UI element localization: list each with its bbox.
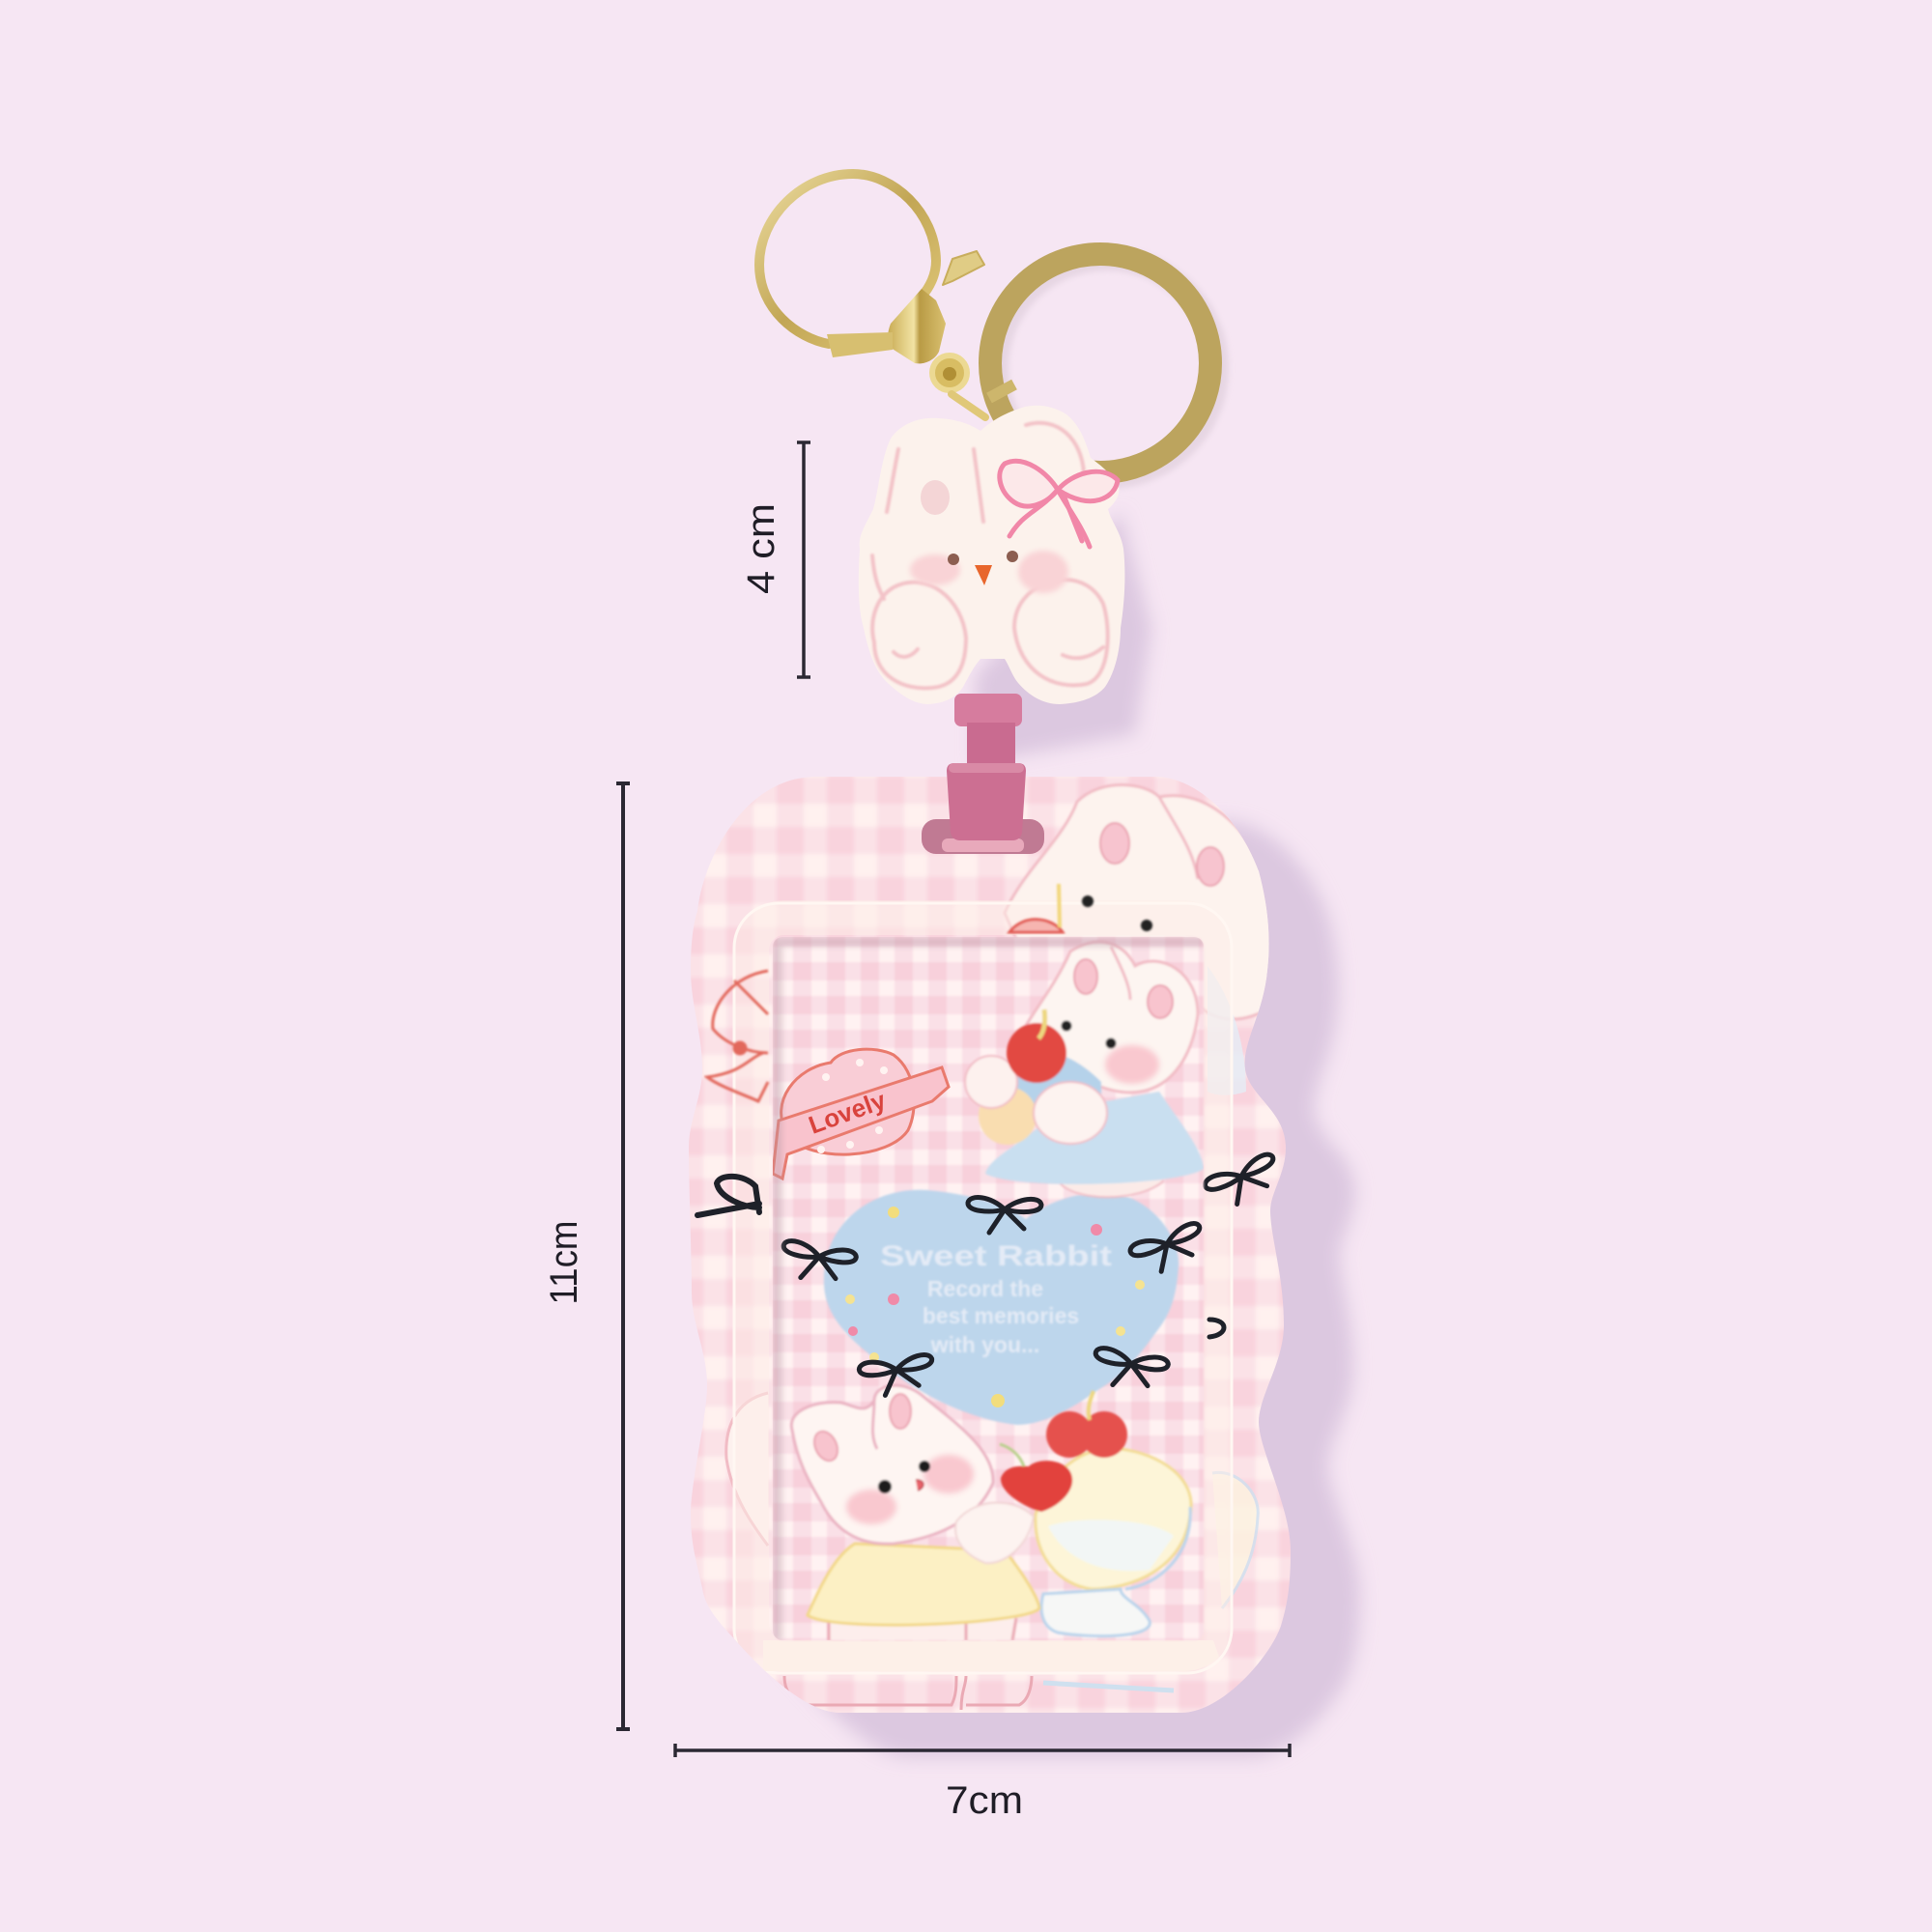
frame edge xyxy=(734,903,1232,1673)
window inner shadow xyxy=(773,937,1204,1640)
lanyard slot xyxy=(922,763,1044,854)
charm blush xyxy=(910,554,960,585)
black bow on card left xyxy=(697,1177,759,1215)
charm nose xyxy=(975,565,992,585)
bow lower right xyxy=(1092,1347,1169,1392)
ribbon xyxy=(773,1067,949,1179)
blue dress rabbit xyxy=(965,942,1204,1197)
ears xyxy=(890,1394,911,1429)
heart sparkles xyxy=(845,1207,1145,1407)
paws xyxy=(965,1056,1017,1108)
polka dots xyxy=(817,1059,902,1153)
dimension: 7cm xyxy=(675,1744,1290,1822)
bow left xyxy=(780,1239,857,1285)
head xyxy=(791,1385,993,1544)
clasp body xyxy=(888,289,946,363)
raised frame xyxy=(752,918,1214,1657)
cup stand xyxy=(1041,1589,1150,1636)
dress xyxy=(808,1544,1039,1625)
rabbit on card top right xyxy=(1005,784,1275,1019)
cup xyxy=(1036,1448,1191,1589)
charm eyes xyxy=(948,554,959,565)
charm body xyxy=(859,406,1124,704)
jump ring xyxy=(932,355,967,390)
cream rim xyxy=(1043,1683,1174,1690)
clasp thumb xyxy=(943,251,984,285)
top cherry xyxy=(1046,1411,1093,1458)
eyes xyxy=(1061,1020,1072,1032)
feet on card bottom xyxy=(784,1676,1032,1710)
blue heart xyxy=(824,1190,1179,1425)
gingham face xyxy=(667,763,1314,1729)
black bow on card right xyxy=(1203,1151,1275,1207)
dimension: 4 cm xyxy=(740,442,810,677)
blue bowl xyxy=(1016,1057,1103,1104)
bottom rabbit and cup xyxy=(791,1385,1191,1640)
red rabbit on card left xyxy=(707,971,768,1101)
ghost ear on card left xyxy=(726,1393,768,1546)
pale dress on card right xyxy=(1208,966,1246,1095)
label 7cm: 7cm xyxy=(946,1779,1023,1822)
bow right xyxy=(1128,1219,1209,1279)
black bow fragment on card right xyxy=(1209,1320,1224,1337)
mouth xyxy=(916,1480,923,1491)
arm xyxy=(955,1503,1034,1563)
rabbit charm xyxy=(859,406,1124,704)
frame bottom band xyxy=(763,1640,1219,1671)
cherry xyxy=(1007,1023,1066,1083)
heart body text: best memories xyxy=(923,1303,1079,1328)
soft shadows xyxy=(758,512,1360,1757)
bow lower left xyxy=(858,1351,937,1399)
held cherry xyxy=(1001,1461,1072,1512)
head xyxy=(1024,942,1198,1093)
legs xyxy=(829,1618,1018,1640)
label 4 cm: 4 cm xyxy=(740,503,782,594)
clasp bar xyxy=(827,332,893,357)
heart body text: with you... xyxy=(930,1332,1039,1357)
heart body text: Record the xyxy=(927,1276,1043,1301)
heart body text xyxy=(923,1276,1079,1357)
charm outline art xyxy=(872,423,1108,688)
eyes xyxy=(878,1480,892,1493)
card body xyxy=(667,763,1314,1729)
ears xyxy=(1074,959,1097,994)
dimension: 11cm xyxy=(543,783,630,1729)
rabbit eyes and cherry on card xyxy=(1009,884,1152,932)
window bows xyxy=(780,1198,1209,1399)
clasp ring xyxy=(759,174,936,344)
label 11cm: 11cm xyxy=(543,1221,585,1304)
product dimension infographic xyxy=(551,169,1366,1814)
ribbon text: Lovely xyxy=(805,1085,890,1140)
lobster clasp xyxy=(759,174,985,417)
blush xyxy=(1105,1045,1159,1084)
charm pink bow xyxy=(1000,461,1118,547)
card lanyard clip xyxy=(954,694,1022,771)
charm inner ear xyxy=(921,480,950,515)
key ring xyxy=(989,254,1217,477)
blush xyxy=(846,1490,896,1524)
heart heading text: Sweet Rabbit xyxy=(880,1240,1112,1272)
pale cup on card right xyxy=(1212,1472,1258,1608)
photo window xyxy=(773,937,1209,1640)
Lovely heart badge xyxy=(773,1049,949,1179)
legs xyxy=(1058,1180,1164,1197)
pastry xyxy=(979,1087,1037,1145)
bow top xyxy=(968,1198,1041,1233)
dress xyxy=(985,1092,1204,1184)
